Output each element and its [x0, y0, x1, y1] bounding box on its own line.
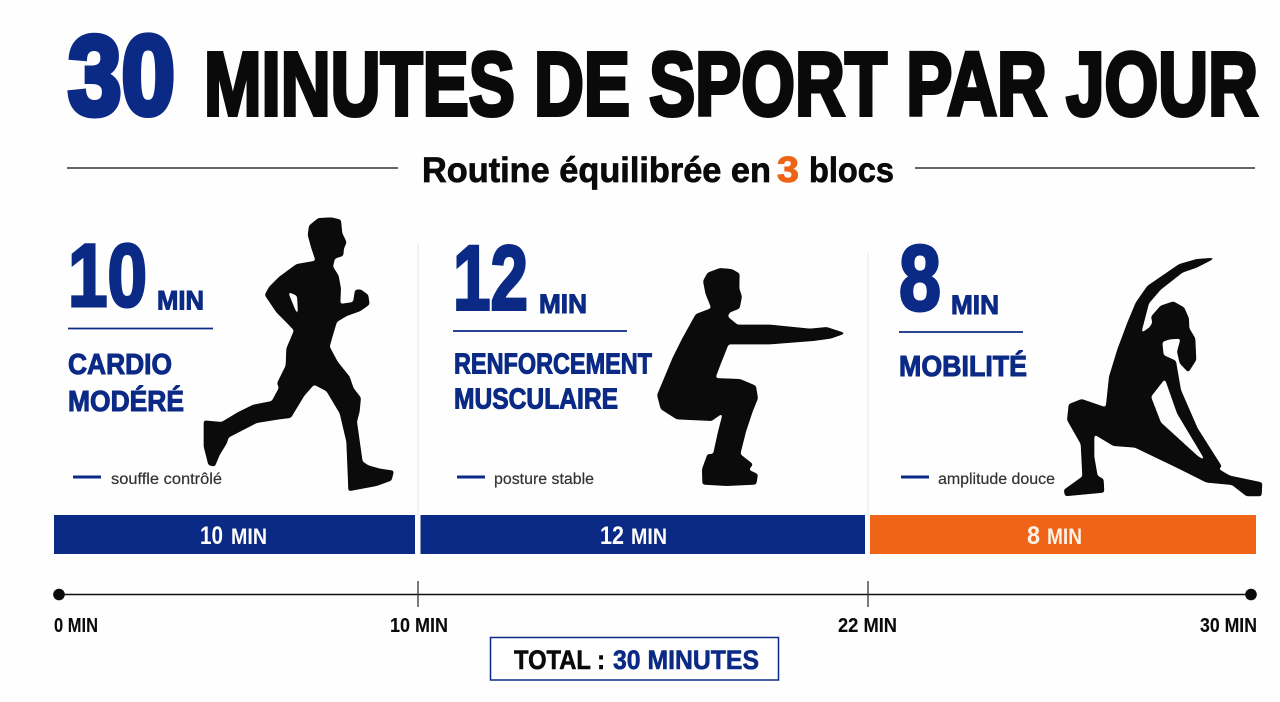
- segment: 10 min: MIN: [231, 524, 267, 549]
- segment: 10 min: 10: [200, 522, 223, 550]
- duration: 8 min: [899, 226, 1023, 332]
- heading: renforcement musculaire: RENFORCEMENT: [454, 348, 652, 380]
- label: 22 min: 22 MIN: [838, 615, 897, 637]
- note: amplitude douce: amplitude douce: [938, 471, 1055, 488]
- icon: runner silhouette: [204, 218, 394, 491]
- subtitle: 3: [777, 149, 799, 190]
- duration: 8 min: MIN: [951, 290, 999, 320]
- segment: 8 min: [870, 515, 1256, 554]
- segment: 12 min: 12: [600, 522, 624, 550]
- duration: 12 min: 12: [453, 228, 528, 330]
- total callout: 30 MINUTES: [613, 645, 759, 675]
- total callout: [490, 638, 778, 680]
- segment: 10 min: [54, 515, 415, 554]
- heading: cardio modéré: CARDIO: [68, 349, 172, 381]
- note: posture stable: posture stable: [494, 471, 594, 488]
- total callout: TOTAL :: [514, 645, 605, 675]
- stacked duration bar: [54, 515, 1256, 554]
- heading: cardio modéré: MODÉRÉ: [68, 384, 184, 418]
- duration: 10 min: MIN: [157, 286, 204, 316]
- icon: stretching silhouette: [1064, 258, 1262, 496]
- segment: 8 min: 8: [1027, 522, 1040, 550]
- icon: squat silhouette: [657, 268, 845, 486]
- duration: 12 min: [453, 228, 627, 331]
- title: [68, 13, 1258, 138]
- timeline: [53, 581, 1257, 637]
- duration: 10 min: 10: [68, 225, 147, 325]
- label: 10 min: 10 MIN: [390, 615, 448, 637]
- heading: cardio modéré: [68, 349, 184, 418]
- panel: renforcement: [453, 228, 845, 488]
- label: 0 min: 0 MIN: [54, 615, 98, 637]
- duration: 8 min: 8: [899, 226, 941, 330]
- duration: 10 min: [68, 225, 213, 328]
- segment: 12 min: MIN: [631, 524, 667, 549]
- heading: renforcement musculaire: MUSCULAIRE: [454, 384, 618, 416]
- panel: cardio: [68, 218, 394, 491]
- heading: mobilité: MOBILITÉ: [899, 349, 1027, 383]
- title: 30: [68, 13, 175, 138]
- panel: mobilité: [899, 226, 1262, 496]
- segment: 12 min: [420, 515, 865, 554]
- note: souffle contrôlé: souffle contrôlé: [111, 471, 222, 488]
- heading: renforcement musculaire: [454, 348, 652, 416]
- segment: 8 min: MIN: [1047, 524, 1082, 549]
- duration: 12 min: MIN: [539, 289, 587, 319]
- label: 30 min: 30 MIN: [1200, 615, 1257, 637]
- subtitle: blocs: [809, 151, 894, 190]
- subtitle: [67, 149, 1255, 190]
- subtitle: Routine équilibrée en: [422, 151, 771, 190]
